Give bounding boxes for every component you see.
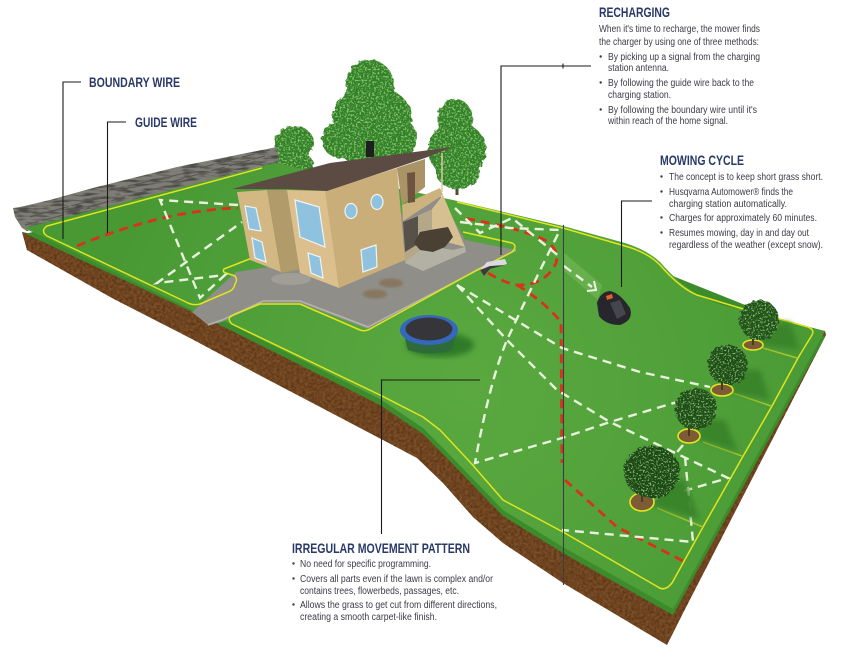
text block: mowing cycle — [660, 152, 823, 251]
label: guide wire: GUIDE WIRE — [135, 114, 197, 130]
text block: irregular movement pattern: No need for specific programming. — [300, 559, 431, 570]
porch interior — [403, 209, 433, 262]
charging station — [480, 259, 507, 276]
lawn surface — [22, 163, 825, 615]
text block: mowing cycle: Husqvarna Automower® finds the — [669, 187, 793, 198]
text block: recharging — [599, 4, 760, 127]
lawn top — [25, 163, 825, 609]
text block: irregular movement pattern: creating a smooth carpet-like finish. — [300, 612, 437, 623]
text block: recharging: the charger by using one of three methods: — [599, 37, 759, 48]
paved patio — [192, 195, 516, 329]
wall footing strip — [26, 166, 264, 232]
entrance steps — [271, 273, 311, 285]
boundary wire: main lawn — [229, 202, 813, 589]
text block: irregular movement pattern: contains trees, flowerbeds, passages, etc. — [300, 586, 459, 597]
porch post — [441, 153, 443, 192]
terrace floor — [405, 243, 466, 271]
lower patio edge — [208, 250, 516, 327]
leader: guide wire — [108, 122, 126, 233]
tree: right of house — [428, 99, 486, 189]
text block: mowing cycle: Resumes mowing, day in and day out — [669, 228, 809, 239]
heading: irregular movement pattern: IRREGULAR MOVEMENT PATTERN — [292, 540, 470, 556]
roof — [232, 147, 453, 191]
text block: recharging: By following the boundary wire until it's — [608, 105, 757, 116]
boundary wire: left lawn — [44, 168, 262, 305]
guide wire: left lawn — [77, 208, 238, 246]
leader: boundary wire — [63, 82, 81, 239]
label: boundary wire: BOUNDARY WIRE — [89, 74, 180, 90]
upper right wall — [397, 159, 425, 205]
text block: recharging: within reach of the home signal. — [607, 116, 728, 127]
trampoline — [400, 315, 474, 357]
left block — [237, 190, 281, 272]
front wall — [325, 168, 405, 288]
text block: recharging: By following the guide wire back to the — [608, 78, 754, 89]
right support wall — [432, 195, 465, 247]
text block: mowing cycle: charging station automatically. — [669, 199, 787, 210]
upper door — [407, 172, 415, 203]
stone wall — [13, 147, 279, 231]
background trees behind house — [262, 60, 486, 195]
heading: recharging: RECHARGING — [599, 4, 670, 20]
house — [232, 141, 466, 288]
tree shadows — [650, 322, 800, 520]
leader: irregular movement pattern — [382, 380, 480, 534]
boundary wire: tree branches — [657, 348, 797, 527]
sun loungers — [363, 278, 403, 298]
mowing paths: left lawn — [157, 200, 242, 298]
mower track — [563, 252, 602, 300]
tree 2 — [708, 345, 748, 385]
windows — [245, 206, 261, 231]
leader: irregular path — [562, 225, 564, 585]
balcony wall — [402, 188, 443, 221]
text block: irregular movement pattern: Allows the grass to get cut from different directions, — [300, 600, 497, 611]
text block: irregular movement pattern: Covers all parts even if the lawn is complex and/or — [300, 574, 494, 585]
tree 4 — [624, 446, 680, 498]
text block: recharging: station antenna. — [608, 63, 669, 74]
mowing paths: right lawn — [455, 208, 728, 542]
middle block — [287, 190, 339, 288]
text block: recharging: When it's time to recharge, the mower finds — [599, 24, 760, 35]
leader: recharging — [501, 64, 591, 255]
text block: mowing cycle: The concept is to keep short grass short. — [669, 172, 823, 183]
text block: mowing cycle: regardless of the weather (except snow). — [669, 240, 823, 251]
text block: recharging: charging station. — [608, 90, 671, 101]
heading: mowing cycle: MOWING CYCLE — [660, 152, 744, 168]
tree: tall centre — [322, 60, 417, 166]
text block: mowing cycle: Charges for approximately 60 minutes. — [669, 213, 817, 224]
arrow: mower direction — [587, 281, 596, 291]
leader lines — [63, 64, 652, 585]
tree 1 — [739, 300, 779, 340]
tree: left of house — [262, 126, 314, 180]
chimney — [366, 141, 374, 157]
lawn bevel edge — [22, 169, 825, 615]
porch glass — [403, 216, 418, 252]
text block: irregular movement pattern — [292, 540, 497, 623]
lawn trees — [624, 300, 779, 502]
robotic mower — [597, 291, 631, 325]
guide wire: right lawn — [463, 218, 683, 561]
tree 3 — [675, 388, 717, 430]
furniture — [414, 227, 453, 252]
tree rings — [630, 340, 763, 511]
text block: recharging: By picking up a signal from the charging — [608, 52, 760, 63]
soil base — [22, 232, 826, 645]
leader: mowing cycle — [622, 201, 652, 287]
